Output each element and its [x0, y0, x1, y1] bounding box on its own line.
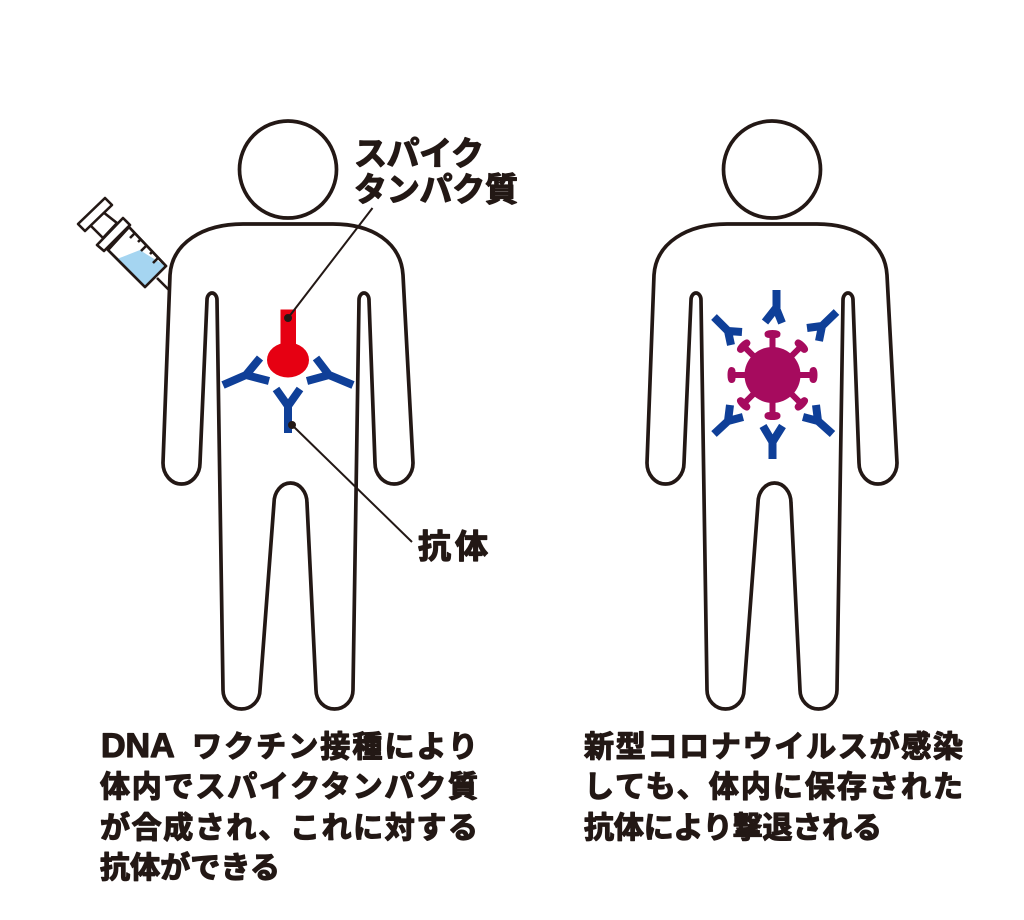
label: spike protein: スパイク — [354, 135, 484, 172]
caption: left — [100, 727, 478, 885]
caption: left: 抗体ができる — [100, 851, 280, 885]
leader: antibody — [289, 422, 412, 542]
spike protein — [267, 310, 309, 378]
panel: left vaccinated figure — [78, 121, 484, 709]
body outline — [647, 224, 897, 709]
caption: right: しても、体内に保存された — [584, 771, 963, 804]
icon: syringe — [78, 198, 170, 291]
caption: left: が合成され、これに対する — [100, 811, 478, 845]
caption: left: ワクチン接種により — [192, 731, 478, 764]
leader: spike protein — [285, 208, 372, 321]
icon: coronavirus — [728, 330, 818, 420]
label: spike protein line 2: タンパク質 — [354, 171, 518, 208]
caption: right: 抗体により撃退される — [584, 812, 882, 845]
head — [240, 121, 336, 218]
panel: right figure with virus — [647, 121, 897, 709]
caption: right: 新型コロナウイルスが感染 — [584, 730, 963, 764]
caption: right — [584, 730, 963, 845]
antibody: bottom — [276, 389, 300, 433]
antibodies around virus — [714, 290, 836, 459]
body outline — [163, 224, 413, 709]
head — [724, 121, 820, 218]
antibody: left — [223, 358, 269, 385]
antibody: right — [307, 358, 353, 385]
label: antibody: 抗体 — [418, 528, 488, 565]
caption: left: 体内でスパイクタンパク質 — [100, 771, 478, 804]
caption: left: DNA — [101, 727, 175, 765]
